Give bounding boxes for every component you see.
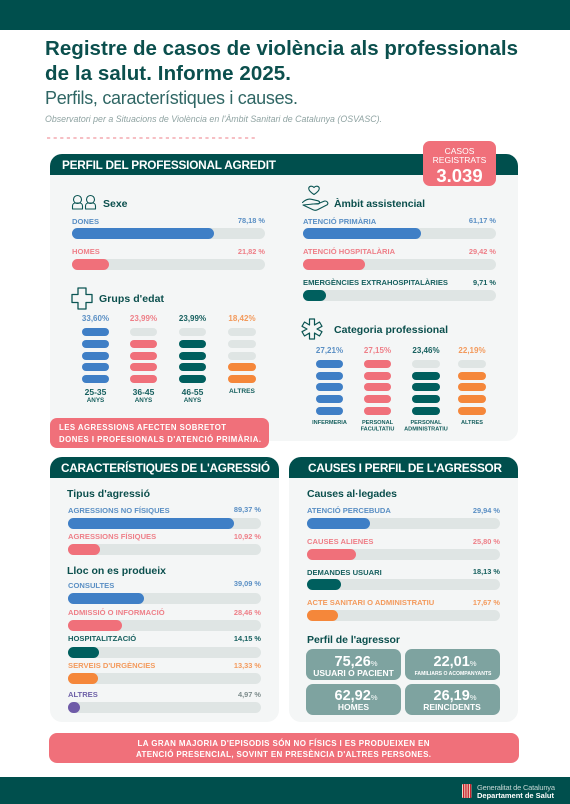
bar: altres: 4,97 % [238, 690, 261, 699]
pictogram: altres: 18,42% [228, 314, 256, 323]
panel header: CARACTERÍSTIQUES DE L'AGRESSIÓ [61, 461, 270, 475]
bar: demandes usuari: 18,13 % [473, 567, 500, 576]
pictogram: 36-45 anys: ANYS [135, 397, 152, 404]
footer text: Departament de Salut [477, 791, 554, 800]
stat card: reincidents: 26,19% [434, 688, 477, 704]
pictogram: 25-35 anys: ANYS [87, 397, 104, 404]
bar: atenció percebuda: 29,94 % [473, 506, 500, 515]
bar: atenció primària [303, 216, 496, 239]
callout: agressions [50, 418, 269, 448]
callout: conclusió [49, 733, 519, 763]
bar: dones: 78,18 % [238, 216, 265, 225]
bar: acte sanitari o administratiu [307, 598, 500, 621]
heading: tipus d'agressió: Tipus d'agressió [67, 488, 150, 500]
bar: altres [68, 690, 261, 713]
stat card: familiars o acompanyants: FAMILIARS O ACOMPANYANTS [415, 671, 492, 677]
bar: agressions no físiques: 89,37 % [234, 505, 261, 514]
bar: admissió o informació: ADMISSIÓ O INFORMACIÓ [68, 608, 165, 617]
icon: asterisk [302, 319, 322, 339]
subtitle: Perfils, característiques i causes. [45, 88, 298, 108]
pictogram: personal administratiu: PERSONAL [410, 420, 442, 426]
bar: atenció hospitalària [303, 247, 496, 270]
title: de la salut. Informe 2025. [45, 62, 291, 85]
heading: causes al·legades: Causes al·legades [307, 488, 397, 500]
pictogram: infermeria: INFERMERIA [312, 420, 347, 426]
stat card: usuari o pacient: 75,26% [335, 654, 378, 670]
pictogram: personal administratiu: ADMINISTRATIU [404, 426, 448, 432]
icon: medical cross [72, 288, 92, 309]
icon: senyera logo [462, 784, 472, 798]
heading: lloc on es produeix: Lloc on es produeix [67, 565, 166, 577]
pictogram: 36-45 anys: 23,99% [130, 314, 157, 323]
bar: homes [72, 247, 265, 270]
pictogram: personal facultatiu [361, 346, 394, 432]
callout: conclusió: ATENCIÓ PRESENCIAL, SOVINT EN PRESÈNCIA D'ALTRES PERSONES. [136, 750, 431, 759]
bar: serveis d'urgències: SERVEIS D'URGÈNCIES [68, 661, 155, 670]
badge: casos registrats: CASOS [445, 146, 475, 156]
panel header [289, 457, 518, 478]
bar: acte sanitari o administratiu: ACTE SANITARI O ADMINISTRATIU [307, 598, 435, 607]
callout: conclusió: LA GRAN MAJORIA D'EPISODIS SÓN NO FÍSICS I ES PRODUEIXEN EN [138, 739, 430, 748]
bar: consultes: 39,09 % [234, 579, 261, 588]
stat card: homes: 62,92% [335, 688, 378, 704]
pictogram: 46-55 anys [179, 314, 206, 404]
bar: agressions físiques: AGRESSIONS FÍSIQUES [68, 532, 156, 541]
bar: atenció percebuda: ATENCIÓ PERCEBUDA [307, 506, 391, 515]
stat card: familiars o acompanyants [405, 649, 500, 680]
pictogram: altres [228, 314, 256, 395]
bar: serveis d'urgències: 13,33 % [234, 661, 261, 670]
pictogram: infermeria [312, 346, 347, 426]
bar: emergències extrahospitalàries [303, 278, 496, 301]
bar: acte sanitari o administratiu: 17,67 % [473, 598, 500, 607]
badge: casos registrats: 3.039 [436, 165, 483, 186]
pictogram: 25-35 anys [82, 314, 109, 404]
pictogram: altres: ALTRES [229, 388, 256, 395]
panel: característiques de l'agressió [50, 457, 279, 722]
panel header: PERFIL DEL PROFESSIONAL AGREDIT [62, 158, 277, 172]
bar: causes alienes: CAUSES ALIENES [307, 537, 373, 546]
bar: emergències extrahospitalàries: EMERGÈNCIES EXTRAHOSPITALÀRIES [303, 278, 448, 287]
bar: altres: ALTRES [68, 690, 98, 699]
stat card: homes [306, 684, 401, 715]
panel header [50, 154, 518, 175]
pictogram: 36-45 anys [130, 314, 157, 404]
stat card: familiars o acompanyants: 22,01% [434, 654, 477, 670]
bar: atenció hospitalària: 29,42 % [469, 247, 496, 256]
bar: agressions físiques: 10,92 % [234, 532, 261, 541]
bar: atenció primària: 61,17 % [469, 216, 496, 225]
pictogram: 46-55 anys: ANYS [184, 397, 201, 404]
pictogram: 46-55 anys: 23,99% [179, 314, 206, 323]
heading: àmbit assistencial: Àmbit assistencial [334, 197, 425, 210]
pictogram: personal facultatiu: FACULTATIU [361, 426, 394, 432]
bar: consultes: CONSULTES [68, 581, 114, 590]
pictogram: personal facultatiu: PERSONAL [362, 420, 394, 426]
pictogram: 46-55 anys: 46-55 [182, 387, 204, 397]
heading: sexe: Sexe [103, 198, 128, 210]
bar: atenció hospitalària: ATENCIÓ HOSPITALÀRIA [303, 247, 396, 256]
stat card: reincidents: REINCIDENTS [423, 702, 481, 712]
icon: people [72, 196, 96, 209]
bar: hospitalització: 14,15 % [234, 634, 261, 643]
bar: demandes usuari [307, 567, 500, 590]
callout: agressions: LES AGRESSIONS AFECTEN SOBRETOT [59, 423, 226, 432]
pictogram: altres categoria: 22,19% [458, 346, 486, 355]
bar: demandes usuari: DEMANDES USUARI [307, 568, 382, 577]
bar: admissió o informació [68, 608, 261, 631]
pictogram: 25-35 anys: 33,60% [82, 314, 109, 323]
panel header: CAUSES I PERFIL DE L'AGRESSOR [308, 461, 502, 475]
bar: dones: DONES [72, 217, 99, 226]
badge: casos registrats [423, 141, 496, 186]
bar: admissió o informació: 28,46 % [234, 608, 261, 617]
bar: agressions no físiques: AGRESSIONS NO FÍSIQUES [68, 506, 170, 515]
bar: hospitalització [68, 634, 261, 658]
bar: consultes [68, 579, 261, 604]
heading: grups d'edat: Grups d'edat [99, 293, 164, 305]
bar: causes alienes: 25,80 % [473, 537, 500, 546]
pictogram: personal facultatiu: 27,15% [364, 346, 391, 355]
panel: perfil del professional agredit [50, 141, 518, 448]
pictogram: altres categoria [458, 346, 486, 426]
footer text: Generalitat de Catalunya [477, 783, 556, 792]
pictogram: 36-45 anys: 36-45 [133, 387, 155, 397]
source: Observatori per a Situacions de Violència en l'Àmbit Sanitari de Catalunya (OSVASC). [45, 114, 382, 124]
bar: agressions no físiques [68, 505, 261, 529]
title [45, 37, 518, 85]
pictogram: 25-35 anys: 25-35 [85, 387, 107, 397]
bar: agressions físiques [68, 532, 261, 555]
bar: dones [72, 216, 265, 239]
badge: casos registrats: REGISTRATS [433, 155, 487, 165]
pictogram: personal administratiu [404, 346, 448, 432]
stat card: homes: HOMES [338, 702, 369, 712]
bar: atenció primària: ATENCIÓ PRIMÀRIA [303, 217, 377, 226]
bar: emergències extrahospitalàries: 9,71 % [473, 278, 496, 287]
panel header [50, 457, 279, 478]
bar: causes alienes [307, 537, 500, 560]
heading: perfil de l'agressor: Perfil de l'agressor [307, 634, 400, 646]
stat card: usuari o pacient: USUARI O PACIENT [313, 668, 395, 678]
bar: serveis d'urgències [68, 661, 261, 684]
bar: hospitalització: HOSPITALITZACIÓ [68, 634, 136, 643]
top banner [0, 0, 570, 30]
icon: hand with heart [302, 186, 328, 210]
bar: homes: HOMES [72, 247, 100, 256]
stat card: reincidents [405, 684, 500, 715]
title: Registre de casos de violència als professionals [45, 37, 518, 60]
panel: causes i perfil de l'agressor [289, 457, 518, 722]
pictogram: infermeria: 27,21% [316, 346, 343, 355]
footer bar [0, 777, 570, 804]
bar: atenció percebuda [307, 506, 500, 529]
callout: agressions: DONES I PROFESIONALS D'ATENCIÓ PRIMÀRIA. [59, 435, 261, 444]
pictogram: personal administratiu: 23,46% [412, 346, 440, 355]
heading: categoria professional: Categoria professional [334, 324, 448, 336]
pictogram: altres categoria: ALTRES [461, 420, 483, 426]
footer text [477, 783, 556, 800]
bar: homes: 21,82 % [238, 247, 265, 256]
stat card: usuari o pacient [306, 649, 401, 680]
